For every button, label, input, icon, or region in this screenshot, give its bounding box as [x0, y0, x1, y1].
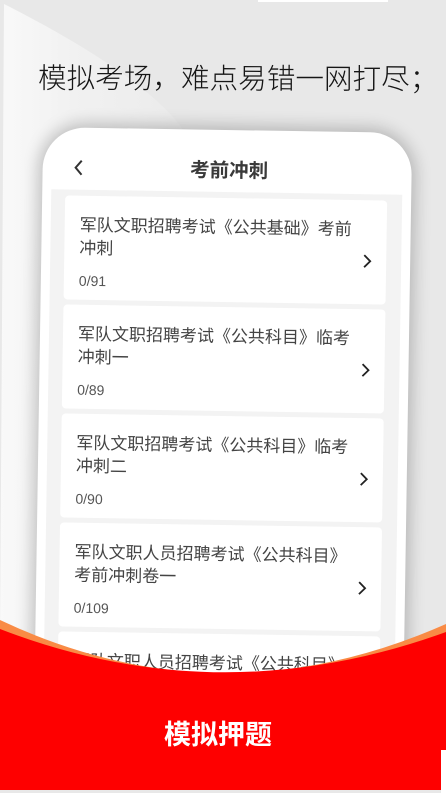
card 4: 0/109 [74, 600, 109, 616]
card 5 [57, 631, 380, 740]
icon: chevron [360, 472, 368, 486]
navigation bar [74, 159, 268, 183]
screen title: 考前冲刺 [190, 159, 268, 183]
card 1: 冲刺 [79, 239, 114, 258]
card 1 [64, 195, 387, 305]
card 1: 0/91 [79, 273, 106, 289]
card 3 [60, 413, 384, 522]
card 2: 军队文职招聘考试《公共科目》临考 [78, 325, 350, 348]
card 4: 考前冲刺卷一 [74, 566, 176, 586]
list background [44, 189, 402, 673]
card 2 [62, 304, 385, 413]
card 4: 军队文职人员招聘考试《公共科目》 [74, 543, 347, 566]
card 2: 0/89 [77, 382, 105, 398]
card 3: 军队文职招聘考试《公共科目》临考 [76, 434, 348, 457]
icon: chevron [358, 582, 366, 595]
phone mockup [35, 127, 412, 673]
card 4 [58, 522, 382, 631]
icon: chevron [364, 254, 372, 268]
card 5: 军队文职人员招聘考试《公共科目》 [73, 652, 345, 675]
footer label: 模拟押题 [164, 720, 272, 750]
card 3: 冲刺二 [76, 457, 127, 476]
icon: chevron [362, 364, 370, 377]
card 1: 军队文职招聘考试《公共基础》考前 [80, 216, 352, 239]
headline: 模拟考场，难点易错一网打尽； [38, 56, 438, 98]
icon: back arrow [74, 160, 82, 176]
card 3: 0/90 [75, 491, 103, 507]
card 2: 冲刺一 [78, 348, 129, 367]
